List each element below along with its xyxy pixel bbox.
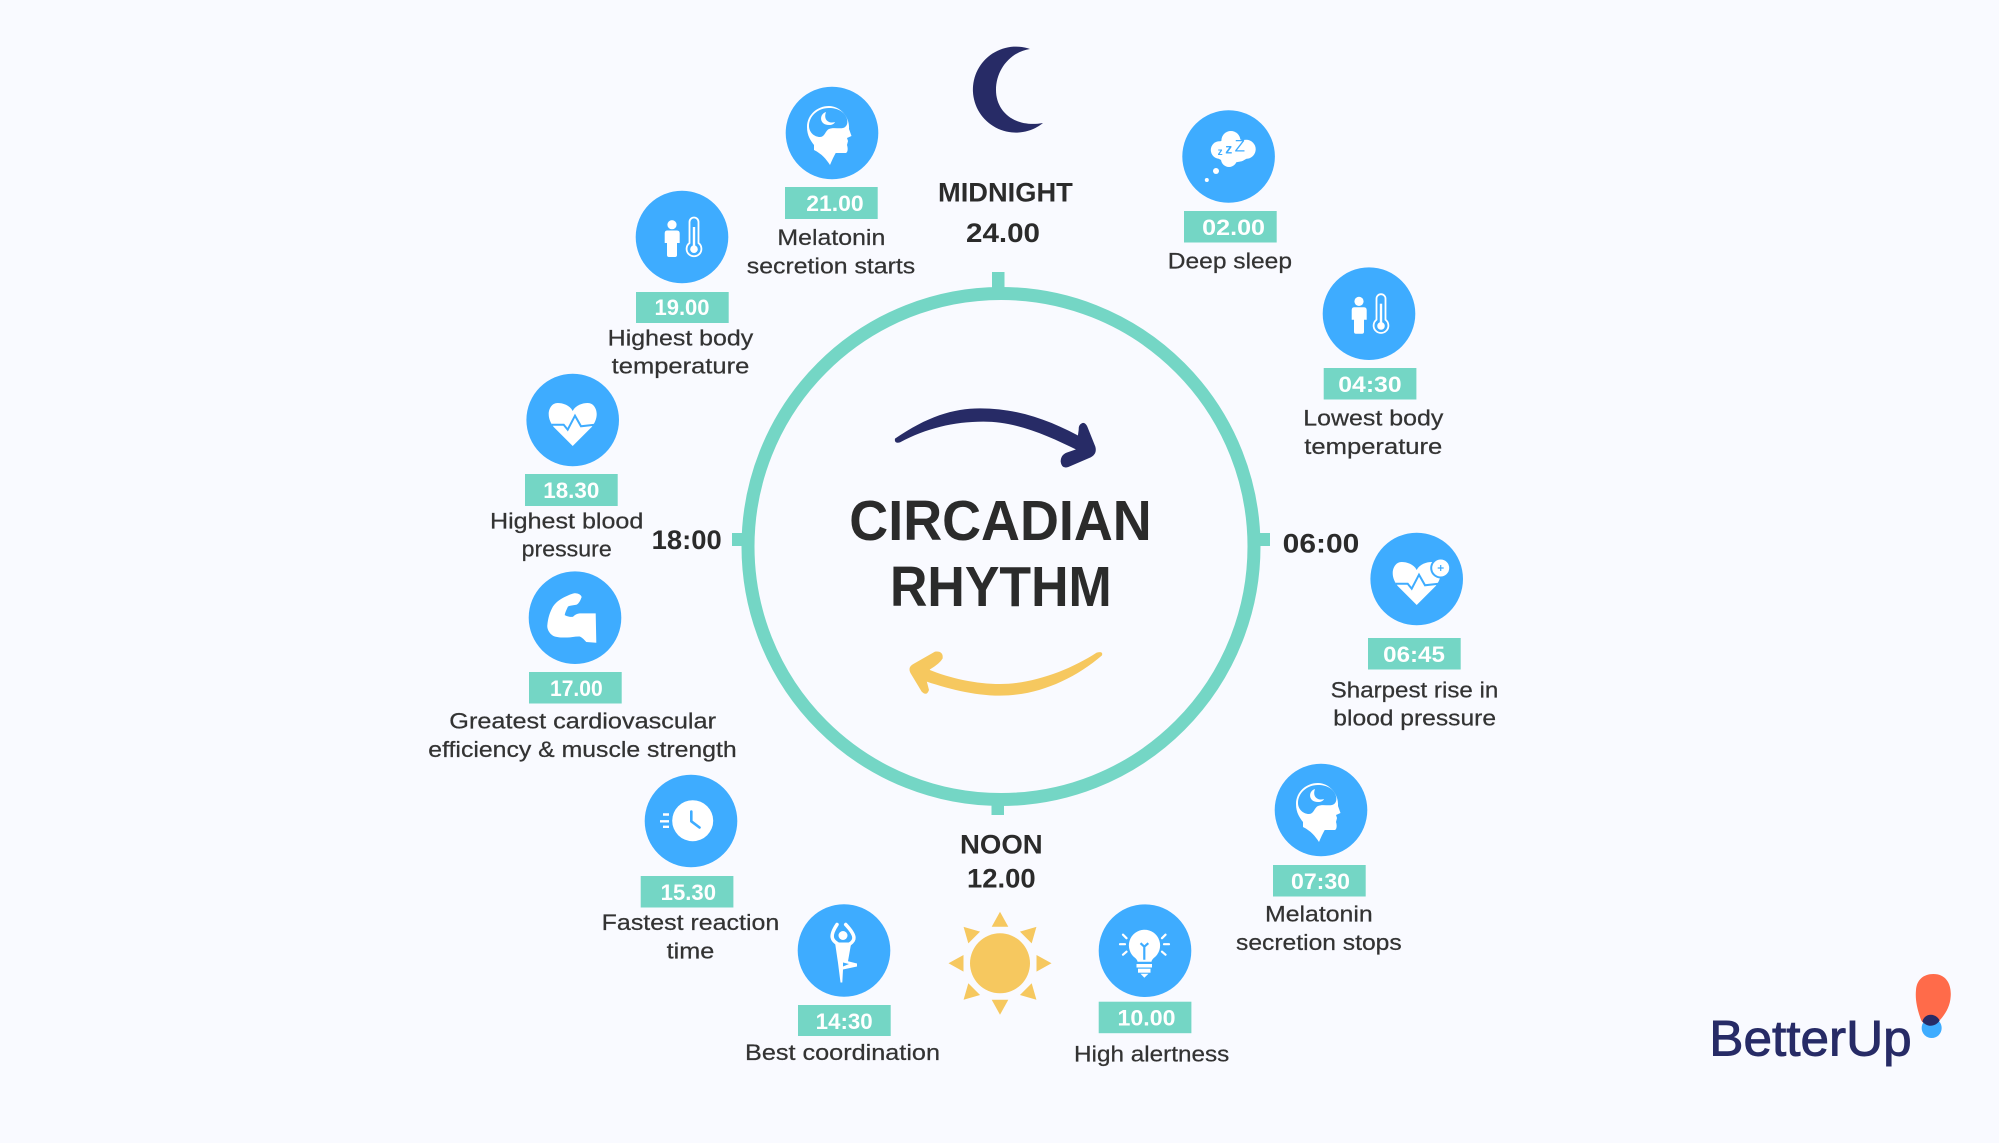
event: 10.00 high alertness <box>1074 904 1229 1067</box>
label: melatonin secretion stops <box>1236 902 1402 955</box>
label: highest blood pressure <box>490 508 643 562</box>
title <box>849 489 1152 619</box>
arrow: yellow clockwise <box>909 652 1102 696</box>
label: highest body temperature <box>608 326 754 378</box>
icon: sleep cloud: z <box>1225 140 1232 156</box>
time badge: 17.00: 17.00 <box>550 676 603 701</box>
time badge: 19.00: 19.00 <box>654 295 710 320</box>
heading: midnight: 24.00 <box>966 218 1040 248</box>
time badge: 07:30 <box>1273 865 1366 896</box>
label: deep sleep: Deep sleep <box>1168 249 1292 274</box>
time badge: 10.00 <box>1099 1002 1191 1033</box>
event: 19.00 highest body temperature <box>608 191 754 378</box>
label: melatonin secretion stops: secretion stops <box>1236 930 1402 955</box>
time badge: 19.00 <box>636 292 729 323</box>
heading: noon: 12.00 <box>967 863 1036 893</box>
icon: sun <box>948 912 1052 1015</box>
time badge: 17.00 <box>529 672 622 704</box>
time badge: 21.00: 21.00 <box>806 191 864 216</box>
event: 02.00 deep sleep <box>1168 110 1292 274</box>
icon: heart pulse <box>526 374 619 466</box>
label: fastest reaction time: Fastest reaction <box>602 910 779 935</box>
logo: BetterUp <box>1709 974 1951 1067</box>
icon: flexed arm <box>529 571 621 664</box>
time badge: 18.30 <box>525 474 618 506</box>
label: sharpest rise in blood pressure: Sharpest rise in <box>1331 677 1498 702</box>
title: CIRCADIAN <box>849 489 1152 553</box>
clock ring <box>732 272 1270 815</box>
event: 07:30 melatonin secretion stops <box>1236 764 1402 955</box>
icon: head with moon <box>1275 764 1367 856</box>
time badge: 02.00 <box>1184 211 1277 242</box>
title: RHYTHM <box>890 555 1112 619</box>
icon: sleep cloud: Z <box>1235 136 1245 156</box>
icon: head with moon <box>786 87 878 179</box>
event: 15.30 fastest reaction time <box>602 775 779 963</box>
label: greatest cardiovascular efficiency and muscle strength <box>428 709 737 762</box>
event: 18.30 highest blood pressure <box>490 374 643 562</box>
label: greatest cardiovascular efficiency and muscle strength: Greatest cardiovascular <box>449 709 717 734</box>
heading: noon <box>960 829 1043 893</box>
arrow: navy clockwise <box>895 408 1096 468</box>
label: fastest reaction time: time <box>667 938 714 963</box>
label: lowest body temperature: Lowest body <box>1303 406 1444 431</box>
time badge: 14:30: 14:30 <box>816 1009 873 1034</box>
label: lowest body temperature: temperature <box>1304 434 1442 459</box>
heading: 06:00: 06:00 <box>1283 529 1359 559</box>
event: 04:30 lowest body temperature <box>1303 267 1444 459</box>
time badge: 06:45: 06:45 <box>1383 642 1445 667</box>
time badge: 10.00: 10.00 <box>1118 1006 1176 1031</box>
label: melatonin secretion stops: Melatonin <box>1265 902 1373 927</box>
icon: heart with plus <box>1370 533 1463 625</box>
label: lowest body temperature <box>1303 406 1444 459</box>
icon: yoga pose <box>798 904 890 997</box>
label: sharpest rise in blood pressure: blood pressure <box>1333 706 1496 731</box>
logo: BetterUp: BetterUp <box>1709 1011 1912 1067</box>
time badge: 04:30: 04:30 <box>1338 372 1402 397</box>
label: best coordination: Best coordination <box>745 1040 940 1065</box>
icon: person and thermometer <box>636 191 728 283</box>
icon: moon <box>973 47 1043 133</box>
heading: midnight <box>938 178 1073 248</box>
time badge: 18.30: 18.30 <box>543 478 599 503</box>
label: highest body temperature: temperature <box>612 353 749 378</box>
label: melatonin secretion starts: secretion starts <box>747 253 915 278</box>
icon: light bulb <box>1099 904 1191 997</box>
heading: midnight: MIDNIGHT <box>938 178 1073 208</box>
label: sharpest rise in blood pressure <box>1331 677 1498 731</box>
heading: 18:00: 18:00 <box>652 525 722 555</box>
time badge: 21.00 <box>785 187 878 219</box>
icon: sleep cloud: z <box>1218 147 1223 158</box>
event: 17.00 cardiovascular efficiency and muscle strength <box>428 571 737 762</box>
event: 14:30 best coordination <box>745 904 940 1065</box>
icon: person and thermometer <box>1323 267 1415 360</box>
label: highest blood pressure: pressure <box>522 537 612 562</box>
icon: fast clock <box>645 775 737 867</box>
label: highest blood pressure: Highest blood <box>490 508 643 533</box>
icon: sleep cloud <box>1182 110 1275 203</box>
time badge: 15.30 <box>641 876 733 908</box>
time badge: 07:30: 07:30 <box>1291 869 1350 894</box>
time badge: 02.00: 02.00 <box>1202 215 1265 240</box>
time badge: 06:45 <box>1368 638 1461 670</box>
event: 06:45 sharpest rise in blood pressure <box>1331 533 1498 731</box>
time badge: 04:30 <box>1324 368 1416 400</box>
time badge: 15.30: 15.30 <box>661 880 716 905</box>
label: melatonin secretion starts: Melatonin <box>777 225 885 250</box>
time badge: 14:30 <box>798 1005 891 1036</box>
label: high alertness: High alertness <box>1074 1042 1229 1067</box>
label: highest body temperature: Highest body <box>608 326 754 351</box>
event: 21.00 melatonin secretion starts <box>747 87 915 278</box>
label: greatest cardiovascular efficiency and muscle strength: efficiency & muscle strength <box>428 737 737 762</box>
heading: noon: NOON <box>960 829 1043 859</box>
label: fastest reaction time <box>602 910 779 963</box>
label: melatonin secretion starts <box>747 225 915 278</box>
